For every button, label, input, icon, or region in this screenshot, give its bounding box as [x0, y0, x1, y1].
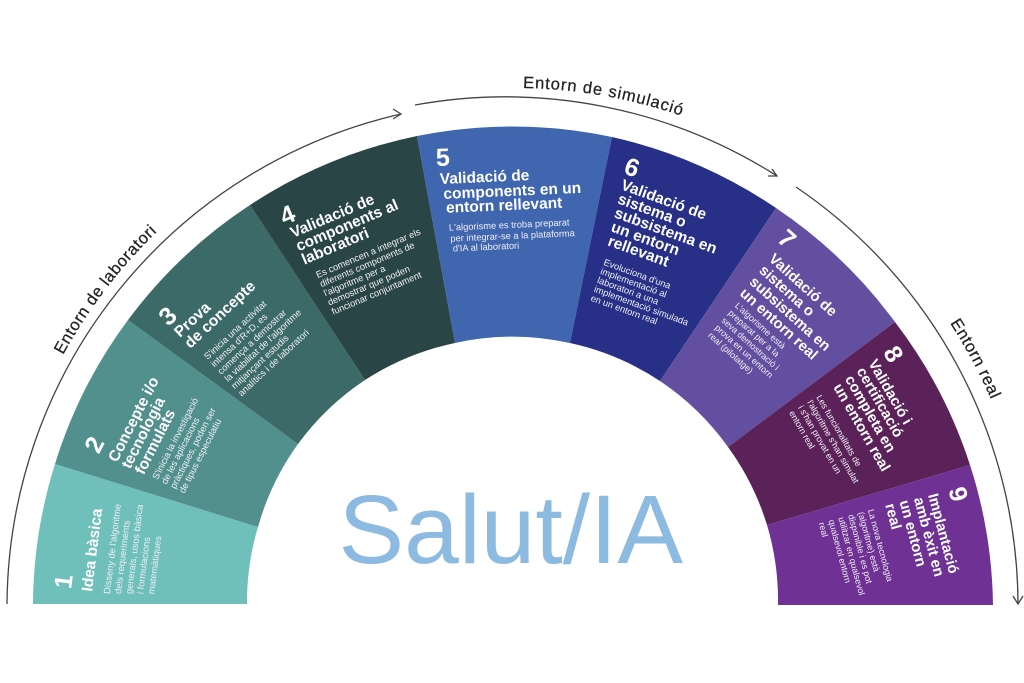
segment 8: Validació i certificació completa en un entorn real: entorn real — [787, 409, 817, 451]
segment 7: Validació de sistema o subsistema en un entorn real: subsistema en — [746, 274, 833, 355]
segment 7: Validació de sistema o subsistema en un entorn real: seva demostració i — [720, 315, 781, 372]
segment 6: Validació de sistema o subsistema en un entorn rellevant: en un entorn real — [589, 293, 659, 326]
segment 3: Prova de concepte: analítics i de laboratori — [236, 327, 311, 398]
segment 4: Validació de components al laboratori — [250, 136, 455, 380]
segment 8: Validació i certificació completa en un entorn real: Les funcionalitats de — [814, 393, 864, 468]
segment 4: Validació de components al laboratori: l'algoritme per a — [322, 263, 388, 298]
segment 6: Validació de sistema o subsistema en un entorn rellevant: laboratori a una — [596, 275, 661, 307]
arrow: Entorn de laboratori — [6, 108, 402, 604]
segment 8: Validació i certificació completa en un entorn real: Validació i — [865, 357, 915, 428]
segment 4: Validació de components al laboratori: funcionar conjuntament — [330, 270, 423, 317]
segment 7: Validació de sistema o subsistema en un entorn real — [660, 208, 895, 447]
segment 9: Implantació amb èxit en un entorn real: 9 — [942, 484, 973, 505]
segment 8: Validació i certificació completa en un entorn real: 8 — [877, 341, 909, 367]
segment 7: Validació de sistema o subsistema en un entorn real: 7 — [772, 224, 801, 254]
segment 2: Concepte i/o tecnologia formulats: tecnologia — [119, 394, 169, 471]
segment 2: Concepte i/o tecnologia formulats: Concepte i/o — [105, 374, 163, 465]
segment 5: Validació de components en un entorn rellevant: 5 — [435, 144, 450, 172]
segment 6: Validació de sistema o subsistema en un entorn rellevant: un entorn — [609, 219, 682, 259]
segment 3: Prova de concepte: la viabilitat de l'algoritme — [223, 307, 303, 384]
segment 9: Implantació amb èxit en un entorn real: La nova tecnologia — [866, 508, 895, 583]
segment 3: Prova de concepte: mitjançant estudis — [229, 333, 291, 391]
arrow: Entorn real: Entorn real — [950, 318, 1002, 398]
segment 1: Idea bàsica — [33, 464, 258, 604]
segment 3: Prova de concepte: de concepte — [181, 278, 259, 352]
segment 7: Validació de sistema o subsistema en un entorn real: prova en un entorn — [713, 323, 775, 380]
segment 7: Validació de sistema o subsistema en un entorn real: L'algorisme està — [733, 300, 788, 351]
segment 8: Validació i certificació completa en un entorn real: un entorn real — [830, 381, 893, 475]
segment 6: Validació de sistema o subsistema en un entorn rellevant: sistema o — [615, 191, 688, 231]
segment 6: Validació de sistema o subsistema en un entorn rellevant — [570, 137, 776, 381]
segment 2: Concepte i/o tecnologia formulats — [55, 320, 298, 527]
segment 9: Implantació amb èxit en un entorn real: disponible i es pot — [846, 513, 874, 585]
segment 9: Implantació amb èxit en un entorn real: un entorn — [895, 499, 929, 569]
segment 4: Validació de components al laboratori: Es comencen a integrar els — [314, 227, 422, 280]
segment 1: Idea bàsica: 1 — [49, 573, 79, 590]
segment 3: Prova de concepte: intensa d'R+D, es — [209, 311, 270, 369]
segment 4: Validació de components al laboratori: 4 — [276, 200, 300, 231]
segment 7: Validació de sistema o subsistema en un entorn real: un entorn real — [736, 286, 820, 363]
segment 3: Prova de concepte: S'inicia una activitat — [202, 299, 269, 362]
segment 6: Validació de sistema o subsistema en un entorn rellevant: subsistema en — [612, 205, 719, 258]
segment 6: Validació de sistema o subsistema en un entorn rellevant: implementació al — [599, 266, 668, 299]
segment 3: Prova de concepte: comença a demostrar — [216, 308, 288, 376]
segment 7: Validació de sistema o subsistema en un entorn real: preparat per a la — [726, 308, 781, 359]
segment 8: Validació i certificació completa en un entorn real: l'algoritme s'han simulat — [805, 398, 861, 485]
arrow: Entorn de simulació: Entorn de simulació — [524, 76, 683, 115]
segment 5: Validació de components en un entorn rellevant: d'IA al laboratori — [453, 241, 519, 253]
segment 4: Validació de components al laboratori: Validació de — [288, 191, 377, 242]
segment 2: Concepte i/o tecnologia formulats: pràctiques, poden ser — [168, 406, 218, 490]
segment 2: Concepte i/o tecnologia formulats: S'inicia la investigació — [150, 396, 200, 481]
segment 1: Idea bàsica: matemàtiques — [146, 535, 163, 595]
arrow: Entorn real — [796, 186, 1024, 606]
segment 1: Idea bàsica: Idea bàsica — [79, 507, 106, 592]
arrow: Entorn de simulació — [414, 76, 778, 177]
segment 4: Validació de components al laboratori: demostrar que poden — [326, 264, 411, 308]
segment 8: Validació i certificació completa en un entorn real — [728, 322, 970, 525]
segment 3: Prova de concepte: Prova — [171, 299, 215, 341]
segment 6: Validació de sistema o subsistema en un entorn rellevant: Validació de — [619, 177, 709, 224]
central title: Salut/IA: Salut/IA — [338, 475, 683, 584]
arrow: Entorn de laboratori: Entorn de laboratori — [54, 224, 156, 354]
segment 6: Validació de sistema o subsistema en un entorn rellevant: 6 — [621, 152, 643, 183]
segment 9: Implantació amb èxit en un entorn real: real — [817, 521, 830, 538]
segment 9: Implantació amb èxit en un entorn real: (algoritme) està — [856, 511, 882, 573]
segment 1: Idea bàsica: dels requeriments — [113, 520, 132, 594]
segment 7: Validació de sistema o subsistema en un entorn real: Validació de — [765, 251, 840, 320]
segment 9: Implantació amb èxit en un entorn real: Implantació — [924, 492, 961, 575]
segment 1: Idea bàsica: Disseny de l'algoritme — [102, 503, 123, 594]
segment 1: Idea bàsica: generals, usos bàsica — [124, 503, 145, 595]
segment 9: Implantació amb èxit en un entorn real: utilitzar en qualsevol — [836, 516, 867, 596]
segment 9: Implantació amb èxit en un entorn real: amb èxit en — [910, 496, 946, 578]
segment 3: Prova de concepte: 3 — [153, 301, 183, 331]
segment 4: Validació de components al laboratori: laboratori — [299, 225, 372, 268]
segment 9: Implantació amb èxit en un entorn real: real — [881, 502, 904, 531]
segment 9: Implantació amb èxit en un entorn real — [767, 465, 993, 605]
segment 6: Validació de sistema o subsistema en un entorn rellevant: Evoluciona d'una — [602, 257, 673, 291]
segment 7: Validació de sistema o subsistema en un entorn real: real (pilotatge) — [706, 330, 755, 376]
segment 2: Concepte i/o tecnologia formulats: de les aplicacions — [159, 416, 202, 486]
segment 5: Validació de components en un entorn rellevant: components en un — [443, 180, 581, 203]
segment 6: Validació de sistema o subsistema en un entorn rellevant: implementació simulada — [593, 284, 691, 328]
segment 8: Validació i certificació completa en un entorn real: i s'han provat en un — [796, 404, 843, 476]
segment 6: Validació de sistema o subsistema en un entorn rellevant: rellevant — [605, 233, 671, 271]
segment 5: Validació de components en un entorn rellevant: entorn rellevant — [446, 195, 563, 217]
segment 8: Validació i certificació completa en un entorn real: completa en — [841, 373, 898, 456]
segment 3: Prova de concepte — [128, 205, 365, 444]
segment 2: Concepte i/o tecnologia formulats: de tipus especulatiu — [177, 417, 223, 495]
segment 4: Validació de components al laboratori: diferents components de — [318, 240, 416, 289]
segment 5: Validació de components en un entorn rellevant: Validació de — [439, 167, 530, 188]
segment 4: Validació de components al laboratori: components al — [294, 197, 401, 255]
segment 5: Validació de components en un entorn rellevant: per integrar-se a la plataforma — [450, 228, 576, 244]
segment 2: Concepte i/o tecnologia formulats: 2 — [79, 432, 110, 458]
segment 8: Validació i certificació completa en un entorn real: certificació — [853, 365, 906, 441]
segment 2: Concepte i/o tecnologia formulats: formulats — [132, 407, 179, 477]
segment 1: Idea bàsica: i formulacions — [135, 536, 152, 595]
segment 5: Validació de components en un entorn rellevant: L'algorisme es troba preparat — [449, 217, 570, 233]
segment 5: Validació de components en un entorn rellevant — [417, 127, 612, 343]
segment 9: Implantació amb èxit en un entorn real: qualsevol entorn — [827, 519, 853, 584]
segment 7: Validació de sistema o subsistema en un entorn real: sistema o — [756, 263, 817, 320]
